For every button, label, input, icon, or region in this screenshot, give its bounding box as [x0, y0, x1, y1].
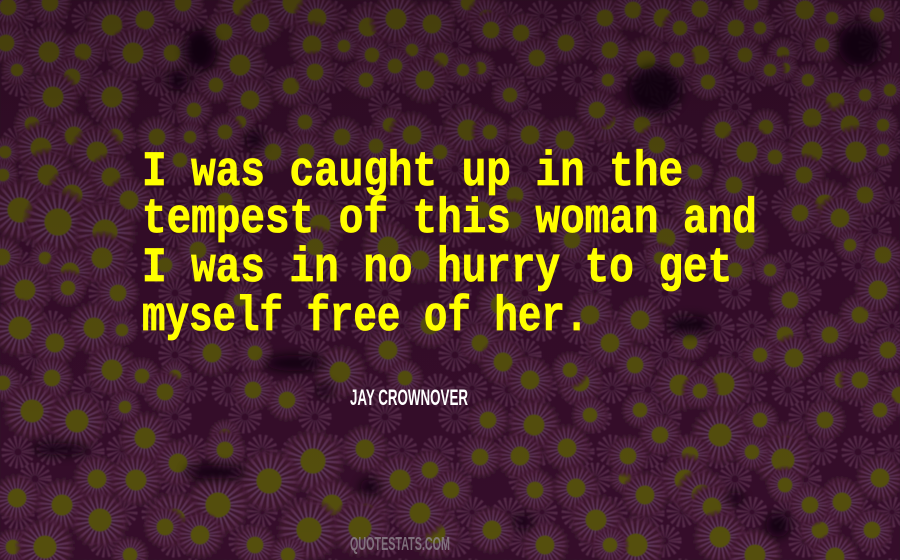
quote text: myself free of her.: [142, 290, 588, 345]
quote text: [142, 144, 757, 345]
author name: JAY CROWNOVER: [350, 385, 468, 410]
quote text: I was caught up in the: [142, 144, 683, 200]
watermark: QUOTESTATS.COM: [350, 534, 450, 554]
quote text: I was in no hurry to get: [142, 240, 732, 296]
quote text: tempest of this woman and: [142, 191, 757, 247]
